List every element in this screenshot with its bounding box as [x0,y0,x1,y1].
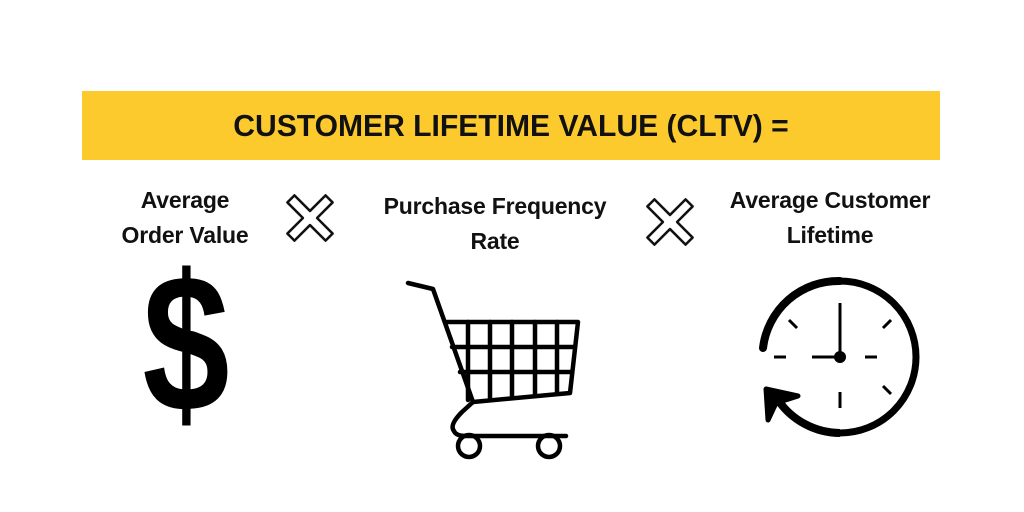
label: average order value: Order Value [122,222,248,248]
icon: multiply sign 1 [272,180,348,256]
label: purchase frequency rate [384,193,606,254]
title banner [82,91,940,160]
label: purchase frequency rate: Purchase Frequency [384,193,606,219]
label: average order value [122,187,248,248]
label: average customer lifetime: Average Customer [730,187,930,213]
label: purchase frequency rate: Rate [470,228,520,254]
icon: multiply sign 2 [632,184,708,260]
label: average order value: Average [141,187,229,213]
icon: clock with arrow [763,281,916,433]
label: average customer lifetime [730,187,930,248]
title: CUSTOMER LIFETIME VALUE (CLTV) = [233,108,789,143]
label: average customer lifetime: Lifetime [787,222,873,248]
icon: dollar sign: $ [142,233,230,453]
icon: shopping cart [408,283,578,457]
